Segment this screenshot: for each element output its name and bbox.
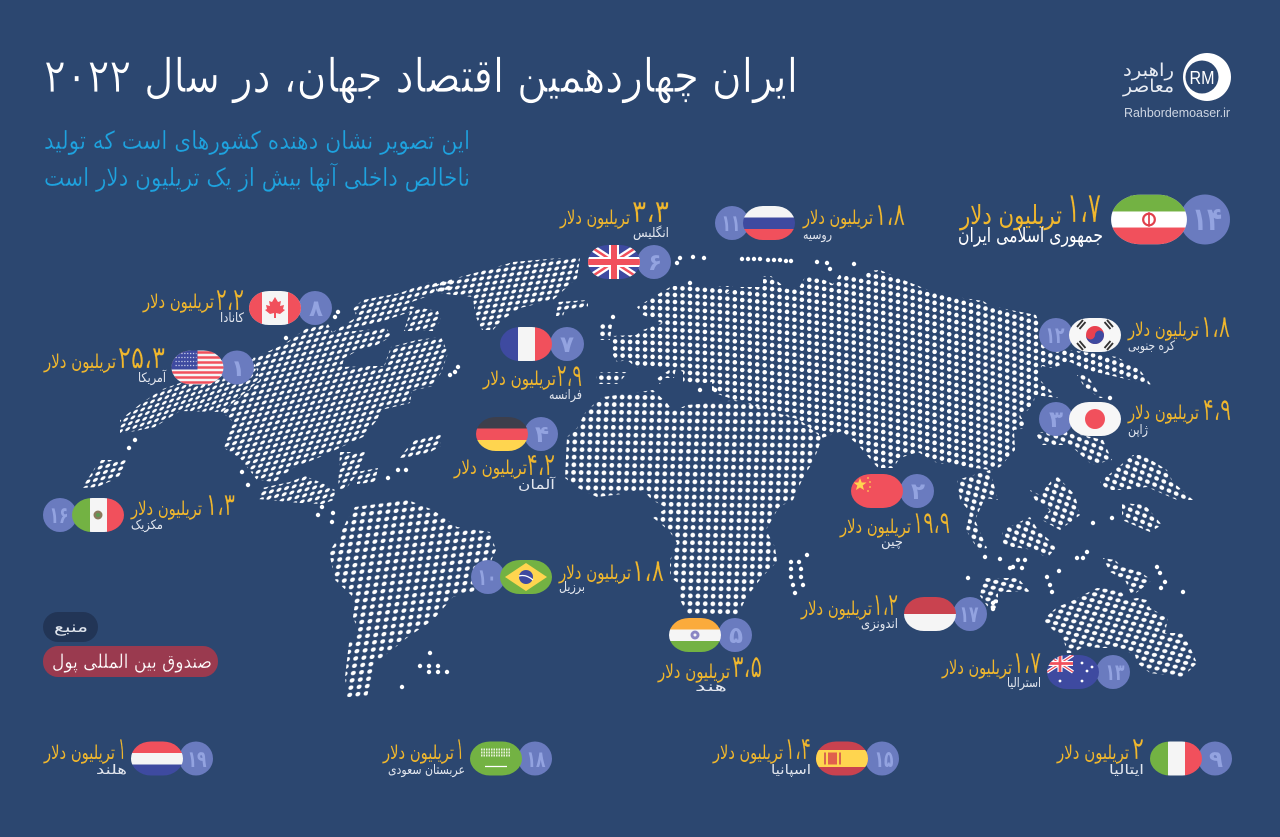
Greenland and Iceland (435, 258, 588, 330)
flag: United States (172, 350, 224, 384)
item: Mexico: تریلیون دلار (130, 498, 202, 520)
item: Iran: تریلیون دلار (958, 201, 1062, 231)
item: South Korea: ۱،۸ (1201, 309, 1230, 345)
item: Germany: ۴ (535, 422, 549, 448)
source badge (43, 612, 98, 642)
flag: India (669, 618, 721, 652)
item: Russia: ۱۱ (722, 211, 740, 237)
item: France: ۲،۹ (557, 358, 582, 394)
flag: Canada (249, 291, 301, 325)
logo: معاصر (1122, 76, 1174, 97)
item: Italy: تریلیون دلار (1056, 742, 1129, 764)
flag: United Kingdom (588, 245, 640, 279)
item: Mexico (43, 495, 234, 532)
item: Germany (453, 417, 558, 493)
item: Iran: جمهوری اسلامی ایران (958, 223, 1103, 247)
item: United Kingdom: انگلیس (633, 225, 669, 241)
flag: Iran (1111, 195, 1187, 244)
item: Netherlands: ۱ (118, 731, 126, 767)
item: India: ۳،۵ (732, 649, 762, 685)
item: Japan: ۳ (1049, 407, 1063, 433)
item: China: چین (881, 535, 903, 550)
item: United States (43, 348, 254, 386)
item: Brazil: تریلیون دلار (558, 562, 631, 584)
item: Brazil (471, 560, 664, 594)
item: India: هند (695, 680, 727, 695)
item: India (657, 618, 762, 695)
item: Spain: اسپانیا (771, 763, 811, 778)
item: Japan: تریلیون دلار (1127, 402, 1199, 424)
flag: South Korea (1069, 318, 1121, 352)
item: Germany: ۴،۲ (527, 447, 555, 483)
item: Italy: ۹ (1209, 747, 1223, 773)
flag: Saudi Arabia (470, 742, 522, 776)
item: Canada: تریلیون دلار (142, 291, 214, 313)
item: Brazil: ۱۰ (478, 565, 496, 591)
item: United Kingdom: ۳،۳ (632, 194, 669, 230)
item: Australia: ۱۳ (1106, 660, 1124, 686)
item: Netherlands: هلند (96, 763, 127, 778)
item: United Kingdom: ۶ (648, 250, 662, 276)
flag: Japan (1069, 402, 1121, 436)
item: Netherlands: تریلیون دلار (43, 742, 115, 764)
item: Iran: ۱،۷ (1067, 183, 1101, 232)
item: Iran (959, 194, 1230, 247)
item: India: ۵ (729, 623, 743, 649)
item: South Korea: کره جنوبی (1128, 339, 1176, 354)
item: Saudi Arabia: عربستان سعودی (388, 763, 465, 778)
item: Australia: ۱،۷ (1013, 645, 1041, 681)
item: Italy: ایتالیا (1109, 763, 1144, 778)
item: Germany: آلمان (518, 476, 557, 493)
item: Canada: ۸ (309, 296, 323, 322)
item: Russia (715, 205, 904, 242)
item: Netherlands (43, 739, 213, 776)
flag: France (500, 327, 552, 361)
item: Saudi Arabia (382, 739, 552, 778)
source name badge (43, 646, 218, 677)
item: South Korea: تریلیون دلار (1127, 319, 1199, 341)
flag: Spain (816, 742, 868, 776)
item: Indonesia: تریلیون دلار (800, 598, 872, 620)
flag: Indonesia (904, 597, 956, 631)
logo: RM (1190, 68, 1214, 88)
item: Iran: ۱۴ (1192, 200, 1222, 238)
item: Mexico: ۱۶ (50, 503, 68, 529)
item: Australia (941, 653, 1130, 690)
item: Mexico: ۱،۳ (206, 487, 235, 523)
scattered island dots (129, 257, 1183, 687)
item: China: ۲ (911, 479, 925, 505)
South America (329, 500, 496, 697)
source name badge: صندوق بین المللی پول (52, 651, 212, 673)
item: Brazil: ۱،۸ (632, 553, 664, 589)
subtitle: ناخالص داخلی آنها بیش از یک تریلیون دلار است (44, 162, 470, 193)
item: Saudi Arabia: تریلیون دلار (382, 742, 454, 764)
flag: China (851, 474, 903, 508)
item: United Kingdom (559, 194, 671, 279)
item: Germany: تریلیون دلار (453, 457, 527, 479)
item: Russia: ۱،۸ (875, 197, 905, 233)
item: Brazil: برزیل (559, 580, 585, 595)
flag: Germany (476, 417, 528, 451)
item: China (839, 474, 950, 550)
item: South Korea (1039, 317, 1230, 354)
item: Indonesia: اندونزی (861, 617, 898, 632)
Africa and Arabia (565, 390, 822, 615)
title: ایران چهاردهمین اقتصاد جهان، در سال ۲۰۲۲ (44, 49, 798, 104)
item: United States: آمریکا (138, 369, 167, 386)
item: Italy (1056, 739, 1232, 776)
item: United States: ۱ (231, 356, 245, 382)
item: Japan (1039, 400, 1230, 438)
item: Netherlands: ۱۹ (188, 747, 206, 773)
flag: Netherlands (131, 742, 183, 776)
item: China: تریلیون دلار (839, 516, 911, 538)
flag: Italy (1150, 742, 1202, 776)
dotted world map (82, 208, 1197, 697)
item: Saudi Arabia: ۱۸ (526, 747, 546, 773)
flag: Russia (743, 206, 795, 240)
item: Canada: ۲،۲ (216, 282, 244, 318)
item: France: ۷ (560, 332, 574, 358)
flag: Australia (1047, 655, 1099, 689)
item: Spain: تریلیون دلار (712, 742, 783, 764)
item: Saudi Arabia: ۱ (456, 731, 464, 767)
item: India: تریلیون دلار (657, 661, 730, 683)
item: Japan: ۴،۹ (1203, 392, 1231, 428)
item: France: فرانسه (549, 388, 582, 403)
item: United States: تریلیون دلار (43, 351, 116, 373)
item: Canada: کانادا (220, 311, 245, 326)
item: France (482, 327, 584, 403)
item: Indonesia: ۱،۲ (873, 587, 898, 623)
item: Russia: تریلیون دلار (802, 207, 873, 229)
logo: راهبرد (1123, 60, 1174, 81)
item: France: تریلیون دلار (482, 368, 556, 390)
item: Spain: ۱۵ (874, 747, 894, 773)
item: Indonesia: ۱۷ (960, 602, 978, 628)
Australia (1043, 588, 1197, 677)
item: China: ۱۹،۹ (913, 505, 950, 541)
item: Australia: تریلیون دلار (941, 657, 1012, 679)
source badge: منبع (54, 618, 88, 636)
item: Japan: ژاپن (1128, 423, 1148, 438)
North America (82, 278, 453, 504)
logo (1122, 53, 1231, 120)
item: Russia: روسیه (803, 228, 832, 243)
item: South Korea: ۱۲ (1046, 323, 1064, 349)
item: Spain: ۱،۴ (785, 731, 811, 767)
item: Indonesia (800, 595, 987, 632)
item: Canada (142, 290, 332, 325)
Eurasia (612, 270, 1151, 470)
item: Spain (712, 739, 899, 777)
Iberia, Britain and Southeast Asia (596, 322, 1193, 610)
item: Australia: استرالیا (1007, 676, 1041, 691)
subtitle: این تصویر نشان دهنده کشورهای است که تولید (44, 126, 470, 155)
logo: Rahbordemoaser.ir (1124, 105, 1231, 120)
item: United Kingdom: تریلیون دلار (559, 207, 630, 229)
flag: Mexico (72, 498, 124, 532)
item: United States: ۲۵،۳ (118, 340, 165, 376)
item: Mexico: مکزیک (131, 518, 163, 533)
subtitle (44, 126, 470, 193)
flag: Brazil (500, 560, 552, 594)
item: Italy: ۲ (1132, 731, 1144, 767)
